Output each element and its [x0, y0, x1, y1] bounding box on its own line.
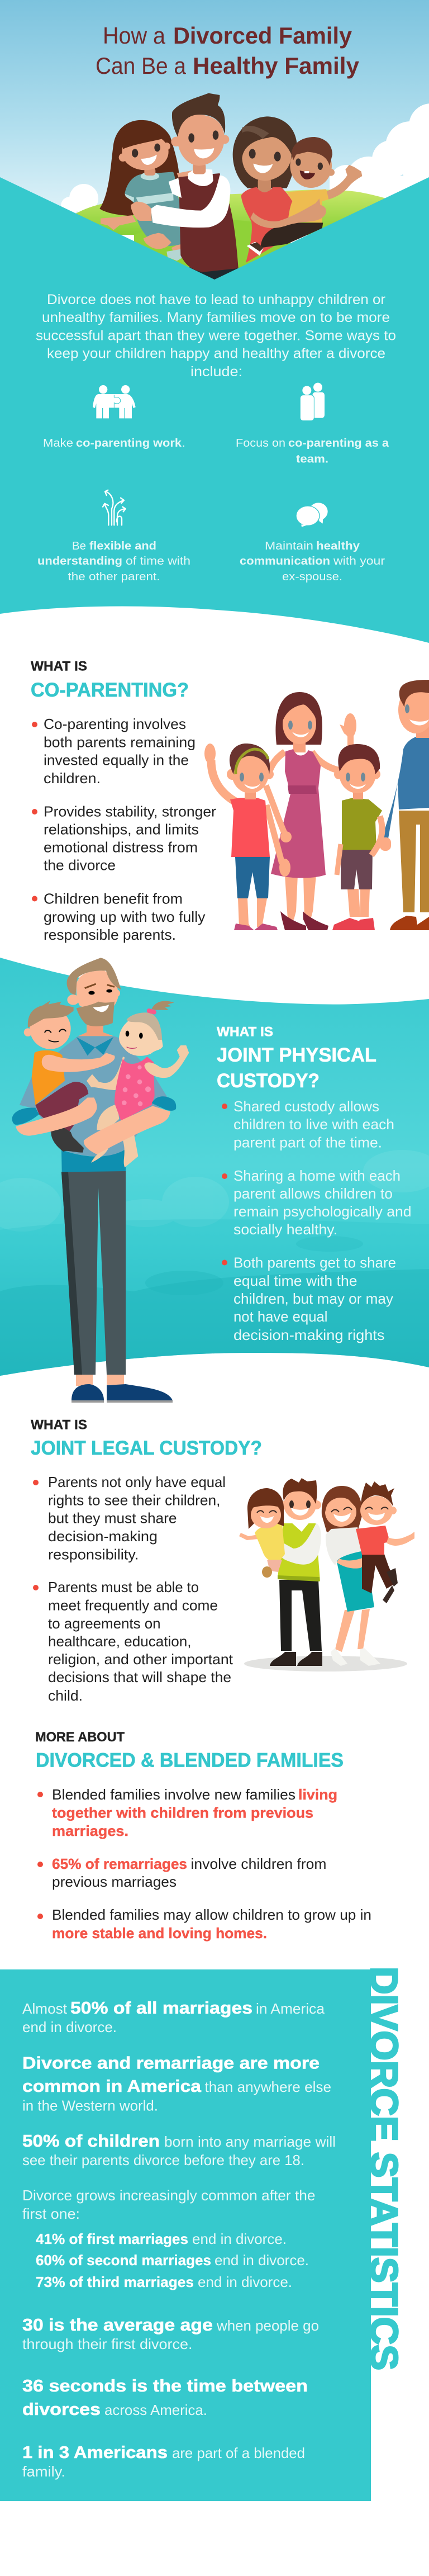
bullet: sharing a home: socially healthy. — [233, 1221, 337, 1238]
boy held behind mother — [287, 165, 362, 222]
bullet: children benefit: Children benefit from — [44, 891, 183, 907]
father head — [67, 958, 121, 1026]
stat: 50 percent of marriages — [22, 1998, 325, 2035]
stat: 1 in 3 Americans — [22, 2442, 305, 2480]
bullet: both parents share time: equal time with the — [233, 1272, 358, 1289]
stat: 50 percent of marriages: Almost — [22, 2000, 68, 2017]
stat: divorce grows more common: 41% of first marriages — [36, 2231, 188, 2247]
stat: divorce grows more common: Divorce grows increasingly common after the — [22, 2187, 315, 2204]
bullet: meet frequently — [33, 1579, 233, 1704]
bullet: provides stability: relationships, and limits — [44, 821, 199, 837]
stat: average age 30: 30 is the average age — [22, 2315, 213, 2334]
caption: maintain healthy communication: with your — [333, 555, 385, 567]
caption: be flexible and understanding: the other parent. — [68, 571, 160, 583]
stat: 50 percent of marriages: 50% of all marriages — [70, 1998, 252, 2018]
bullet: meet frequently: child. — [48, 1687, 83, 1704]
boy in olive shirt — [332, 744, 382, 930]
icon: two people standing together — [300, 383, 325, 421]
intro paragraph: unhealthy families. Many families move on to be more — [42, 310, 390, 325]
bullet: children benefit: responsible parents. — [44, 926, 176, 943]
intro paragraph: Divorce does not have to lead to unhappy children or — [47, 292, 385, 307]
bullet: blended families involve: living — [298, 1786, 337, 1803]
older child — [24, 1001, 115, 1153]
illustration: father carrying two children — [12, 958, 189, 1403]
stat: 50 percent of children: born into any marriage will — [164, 2133, 336, 2150]
bullet: provides stability — [32, 803, 216, 873]
stat: divorce grows more common: first one: — [22, 2205, 80, 2222]
stat: divorce grows more common — [22, 2187, 315, 2290]
heading: what is co-parenting: WHAT IS — [31, 659, 87, 674]
illustration: standing family waving — [204, 680, 429, 930]
heading: what is joint physical custody: WHAT IS — [217, 1024, 273, 1040]
panel: divorce statistics — [0, 1967, 406, 2501]
caption: make co-parenting work: Make — [43, 437, 73, 449]
bullet: both parents share time: decision-making rights — [233, 1327, 384, 1343]
bullet: children benefit — [32, 891, 206, 943]
bullet: blended families involve: Blended families involve new families — [52, 1786, 295, 1803]
father in lime vest — [267, 1478, 322, 1666]
stat: 1 in 3 Americans: are part of a blended — [172, 2445, 305, 2461]
mother — [233, 116, 297, 263]
stat: divorce grows more common: end in divorce. — [214, 2252, 309, 2269]
bullet: involves both parents: both parents remaining — [44, 734, 196, 751]
caption: maintain healthy communication: communication — [240, 555, 330, 567]
girl — [99, 120, 201, 261]
heading: more about blended families: MORE ABOUT — [35, 1730, 125, 1745]
intro paragraph: include: — [190, 364, 242, 380]
stat: more common in America: Divorce and remarriage are more — [22, 2053, 320, 2073]
bullet: 65 percent of remarriages: previous marriages — [52, 1873, 177, 1890]
stat: average age 30: through their first divorce. — [22, 2336, 192, 2352]
father torso and shirt — [20, 1024, 168, 1172]
title: Healthy Family — [193, 53, 360, 79]
stat: divorce grows more common: 73% of third marriages — [36, 2274, 194, 2290]
title: How a — [103, 22, 166, 49]
heading: more about blended families: DIVORCED & BLENDED FAMILIES — [36, 1750, 344, 1772]
bullet: meet frequently: meet frequently and come — [48, 1597, 218, 1613]
bullet: blended families involve — [37, 1786, 337, 1839]
section: co-parenting — [31, 659, 216, 943]
heading: what is joint legal custody: JOINT LEGAL CUSTODY? — [31, 1437, 262, 1459]
caption: maintain healthy communication: ex-spouse. — [282, 571, 342, 583]
icon: speech bubbles — [296, 503, 328, 527]
bullet: shared custody: children to live with each — [233, 1116, 394, 1133]
bullet: sharing a home: remain psychologically and — [233, 1203, 411, 1220]
bullet: involves both parents: invested equally in the — [44, 752, 189, 769]
heading: what is joint legal custody: WHAT IS — [31, 1418, 87, 1432]
intro paragraph: keep your children happy and healthy after a divorce — [47, 346, 385, 362]
caption: be flexible and understanding: understanding — [37, 555, 122, 567]
bullet: more stable homes: more stable and loving homes. — [52, 1925, 267, 1942]
bullet: shared custody: Shared custody allows — [233, 1098, 379, 1115]
hero sky background — [0, 0, 429, 291]
stat: 50 percent of children: 50% of children — [22, 2131, 160, 2151]
bullet: meet frequently: healthcare, education, — [48, 1633, 191, 1650]
bullet: shared custody: parent part of the time. — [233, 1134, 382, 1150]
father at right edge — [380, 680, 429, 930]
bullet: provides stability: emotional distress from — [44, 839, 198, 855]
stat: more common in America: than anywhere else — [204, 2078, 331, 2095]
stat: divorce grows more common: 60% of second marriages — [36, 2252, 211, 2269]
bullet: blended families involve: marriages. — [52, 1822, 128, 1839]
caption: make co-parenting work: . — [182, 437, 185, 449]
bullet: more stable homes: Blended families may allow children to grow up in — [52, 1906, 371, 1923]
mother in teal skirt — [322, 1486, 380, 1666]
bullet: shared custody — [222, 1098, 394, 1150]
raised hand — [340, 713, 356, 752]
bullet: equal rights: but they must share — [48, 1510, 177, 1527]
bullet: 65 percent of remarriages: 65% of remarriages — [52, 1855, 187, 1872]
caption: maintain healthy communication — [240, 540, 385, 583]
intro paragraph: successful apart than they were together. Some ways to — [36, 328, 396, 343]
caption: focus on co-parenting as a team: Focus on — [236, 437, 285, 449]
heading: what is joint physical custody — [217, 1024, 376, 1092]
mother in dress — [269, 692, 345, 930]
intro paragraph — [36, 292, 396, 380]
father — [131, 93, 239, 282]
caption: make co-parenting work: co-parenting work — [76, 437, 182, 449]
vertical heading: divorce statistics: DIVORCE STATISTICS — [363, 1967, 406, 2370]
bullet: blended families involve: together with children from previous — [52, 1805, 313, 1821]
stat: divorce grows more common: end in divorce. — [198, 2274, 292, 2290]
bullet: equal rights — [33, 1474, 226, 1562]
stat: 50 percent of marriages: end in divorce. — [22, 2019, 117, 2035]
caption: make co-parenting work — [43, 437, 185, 449]
bullet: children benefit: growing up with two fully — [44, 908, 206, 925]
stat: divorce grows more common: end in divorce. — [192, 2231, 287, 2247]
heading: what is co-parenting — [31, 659, 189, 701]
illustration: joyful family with shadow — [239, 1478, 414, 1671]
stat: more common in America — [22, 2053, 331, 2114]
father left arm and cuff — [12, 1097, 97, 1136]
bullet: both parents share time: not have equal — [233, 1308, 327, 1325]
stat: average age 30 — [22, 2315, 319, 2352]
girl with headband — [204, 744, 292, 930]
bullet: equal rights: Parents not only have equal — [48, 1474, 226, 1490]
caption: focus on co-parenting as a team — [236, 437, 389, 465]
bullet: involves both parents: Co-parenting involves — [44, 716, 186, 732]
bullet: sharing a home — [222, 1167, 411, 1238]
heading: more about blended families — [35, 1730, 344, 1772]
stat: more common in America: in the Western world. — [22, 2097, 158, 2114]
panel: joint physical custody wave background — [0, 958, 429, 1376]
section: more about divorced and blended families — [35, 1730, 371, 1942]
title: Divorced Family — [173, 22, 352, 49]
bullet: equal rights: responsibility. — [48, 1546, 139, 1562]
illustration: smiling family of four — [99, 93, 362, 282]
stat: 1 in 3 Americans: family. — [22, 2463, 65, 2480]
stat: 1 in 3 Americans: 1 in 3 Americans — [22, 2442, 168, 2462]
icon: branching arrows — [103, 490, 126, 525]
stat: 36 seconds: across America. — [104, 2402, 207, 2418]
heading: what is co-parenting: CO-PARENTING? — [31, 679, 189, 701]
caption: be flexible and understanding: of time with — [126, 555, 190, 567]
father legs and shoes — [61, 1171, 173, 1403]
icon: two people joining puzzle pieces — [93, 385, 136, 418]
bullet: equal rights: rights to see their children, — [48, 1492, 220, 1509]
caption: focus on co-parenting as a team: team. — [296, 453, 328, 465]
heading: what is joint physical custody: CUSTODY? — [217, 1070, 320, 1092]
caption: focus on co-parenting as a team: co-parenting as a — [288, 437, 389, 449]
title: Can Be a — [96, 53, 187, 79]
bullet: sharing a home: Sharing a home with each — [233, 1167, 401, 1184]
caption: maintain healthy communication: Maintain — [265, 540, 313, 552]
bullet: meet frequently: Parents must be able to — [48, 1579, 199, 1595]
bullet: provides stability: the divorce — [44, 856, 116, 873]
bullet: provides stability: Provides stability, stronger — [44, 803, 216, 820]
bullet: sharing a home: parent allows children to — [233, 1185, 393, 1202]
boy face and legs — [247, 137, 335, 255]
bullet: 65 percent of remarriages: involve children from — [191, 1855, 326, 1872]
baby girl — [87, 1001, 189, 1167]
bullet: equal rights: decision-making — [48, 1528, 158, 1545]
girl in yellow dress — [239, 1488, 285, 1578]
stat: 50 percent of children: see their parents divorce before they are 18. — [22, 2152, 304, 2168]
stat: 36 seconds: 36 seconds is the time between — [22, 2376, 308, 2395]
stat: 50 percent of children — [22, 2131, 336, 2168]
bullet: meet frequently: to agreements on — [48, 1615, 161, 1632]
father right arm and cuff — [84, 1096, 176, 1154]
bullet: involves both parents: children. — [44, 770, 101, 787]
bullet: both parents share time — [222, 1254, 396, 1343]
bullet: both parents share time: children, but may or may — [233, 1290, 393, 1307]
bullet: involves both parents — [32, 716, 196, 787]
stat: 36 seconds: divorces — [22, 2399, 101, 2419]
bullet: meet frequently: decisions that will shape the — [48, 1669, 231, 1685]
bullet: meet frequently: religion, and other important — [48, 1651, 233, 1668]
caption: be flexible and understanding: Be — [72, 540, 86, 552]
section: joint legal custody — [31, 1418, 262, 1704]
stat: average age 30: when people go — [216, 2317, 319, 2334]
stat: 36 seconds — [22, 2376, 308, 2419]
stat: more common in America: common in America — [22, 2076, 202, 2096]
caption: maintain healthy communication: healthy — [316, 540, 360, 552]
caption: be flexible and understanding: flexible and — [89, 540, 156, 552]
boy in red shirt — [356, 1481, 414, 1603]
heading: what is joint legal custody — [31, 1418, 262, 1459]
bullet: more stable homes — [37, 1906, 371, 1942]
bullet: both parents share time: Both parents get to share — [233, 1254, 396, 1271]
title — [96, 22, 360, 79]
bullet: 65 percent of remarriages — [37, 1855, 326, 1890]
caption: be flexible and understanding — [37, 540, 190, 583]
heading: what is joint physical custody: JOINT PHYSICAL — [217, 1044, 376, 1066]
teal intro panel — [0, 177, 429, 643]
stat: 50 percent of marriages: in America — [256, 2000, 325, 2017]
